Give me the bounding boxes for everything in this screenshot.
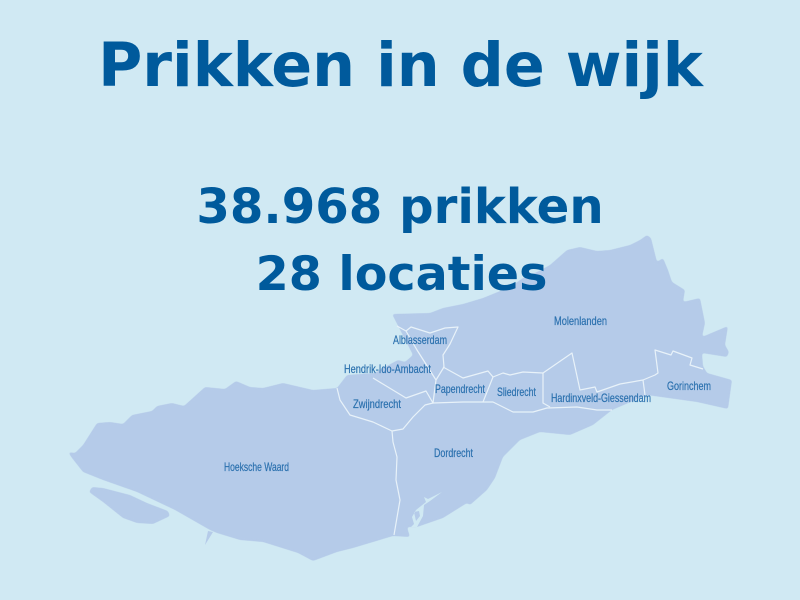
title: Prikken in de wijk <box>98 31 705 101</box>
map labels: Molenlanden <box>554 314 607 328</box>
map: island <box>89 487 170 524</box>
map labels: Gorinchem <box>667 379 711 393</box>
map labels: Papendrecht <box>435 382 485 396</box>
map: inlet <box>411 492 442 527</box>
map labels: Hoeksche Waard <box>224 460 289 474</box>
map labels: Dordrecht <box>434 446 473 460</box>
map labels: Zwijndrecht <box>353 397 402 411</box>
map labels: Sliedrecht <box>497 385 536 399</box>
map labels: Hendrik-Ido-Ambacht <box>344 362 432 376</box>
map labels: Alblasserdam <box>393 333 447 347</box>
map of the region <box>68 235 732 561</box>
map: municipal borders <box>337 326 703 535</box>
statistic: prikken: 38.968 prikken <box>196 179 604 235</box>
map: small spit <box>205 531 213 545</box>
map labels: Hardinxveld-Giessendam <box>551 391 651 405</box>
map: mainland shape <box>68 235 732 561</box>
statistic: locaties: 28 locaties <box>256 247 547 302</box>
map labels <box>224 314 711 474</box>
